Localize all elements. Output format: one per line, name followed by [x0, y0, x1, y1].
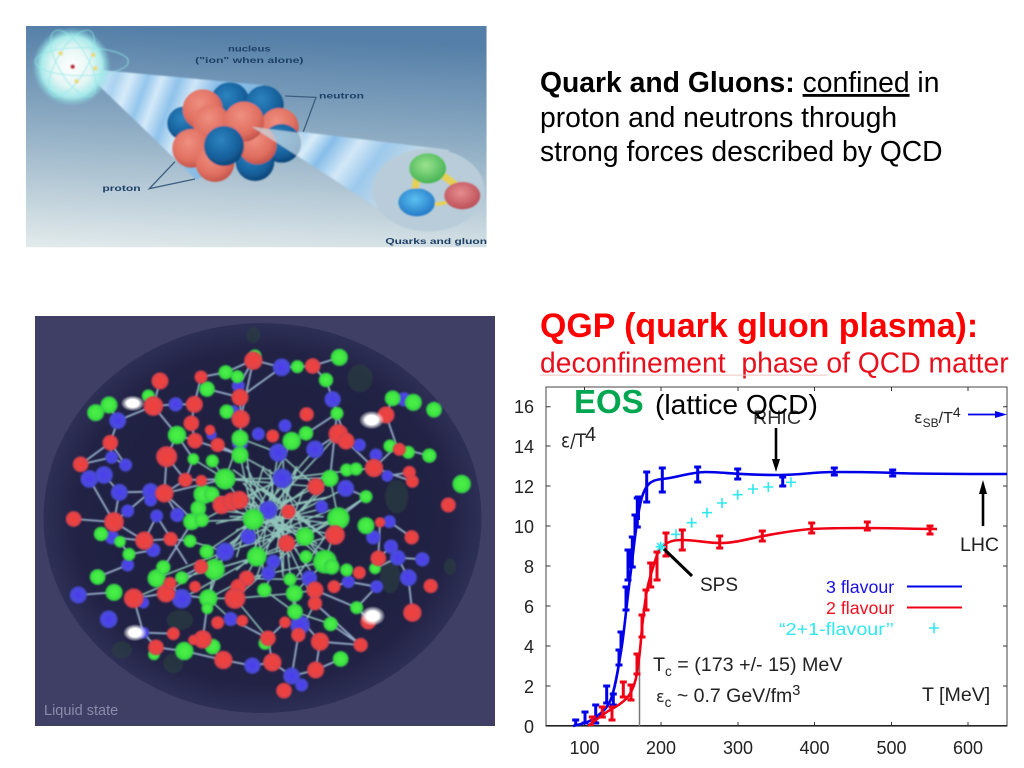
y axis title exponent: 4	[585, 424, 596, 446]
legend: “2+1-flavour’’	[779, 619, 894, 639]
y axis labels: 8	[524, 557, 534, 577]
label and arrow: RHIC: RHIC	[753, 407, 801, 429]
legend: 3 flavour	[826, 577, 894, 597]
diagram labels	[102, 43, 494, 246]
y axis title: ε/T	[561, 430, 586, 452]
label and arrow: RHIC	[753, 407, 801, 472]
ghost particles	[112, 327, 456, 673]
y axis labels: 4	[524, 637, 534, 657]
text block: quark and gluons: strong forces described by QCD	[540, 135, 943, 167]
x axis labels: 200	[646, 738, 676, 758]
panel: quark gluon plasma simulation	[35, 316, 495, 726]
icon: atom	[32, 24, 128, 106]
x axis title: T [MeV]	[922, 684, 990, 706]
white glowing particles	[121, 395, 385, 641]
subheading: deconfinement phase: deconfinement phase of QCD matter	[540, 346, 1009, 378]
label and arrow: Stefan-Boltzmann limit: 4	[953, 404, 961, 420]
text block: quark and gluons: Quark and Gluons: confined in	[540, 66, 939, 98]
label and arrow: Stefan-Boltzmann limit	[914, 404, 1007, 430]
y axis labels	[514, 397, 534, 737]
x axis labels	[569, 738, 983, 758]
y axis labels: 2	[524, 677, 534, 697]
y axis labels: 0	[524, 717, 534, 737]
legend	[779, 577, 962, 639]
curve: 2 flavour	[588, 522, 937, 726]
heading: QGP: QGP (quark gluon plasma):	[540, 307, 978, 345]
label and arrow: SPS	[664, 549, 738, 596]
icon: quarks and gluons	[398, 153, 480, 216]
label and arrow: Stefan-Boltzmann limit: SB	[923, 416, 939, 430]
x axis labels: 300	[723, 738, 753, 758]
x axis labels: 600	[953, 738, 983, 758]
text block: quark and gluons: proton and neutrons through	[540, 101, 897, 133]
icon: second cone to quarks	[296, 131, 450, 206]
y axis labels: 14	[514, 437, 534, 457]
critical temperature line	[638, 660, 640, 726]
text block: quark and gluons	[540, 66, 943, 167]
label and arrow: SPS: SPS	[700, 575, 738, 596]
x axis labels: 100	[569, 738, 600, 758]
critical temperature text: c	[665, 695, 672, 710]
icon: cone from atom to nucleus	[98, 70, 263, 180]
x axis labels: 400	[799, 738, 830, 758]
label and arrow: LHC	[960, 480, 999, 556]
text block: EOS heading: EOS	[574, 383, 644, 420]
icon: quark bubble	[372, 149, 484, 231]
critical temperature text: c	[665, 664, 672, 679]
legend: 2 flavour	[826, 598, 894, 618]
plot frame	[546, 387, 1007, 726]
leader lines	[149, 96, 316, 189]
red quarks	[66, 352, 455, 698]
critical temperature text: ~ 0.7 GeV/fm	[671, 685, 792, 707]
icon: nucleus protons and neutrons	[167, 82, 303, 182]
particle bonds	[74, 357, 429, 676]
y axis labels: 10	[514, 517, 534, 537]
x axis labels: 500	[876, 738, 907, 758]
label and arrow: LHC: LHC	[960, 534, 999, 556]
label and arrow: Stefan-Boltzmann limit: /T	[939, 410, 953, 427]
critical temperature text: ε	[656, 687, 665, 706]
chart: energy density vs temperature	[514, 387, 1007, 758]
green quarks	[88, 349, 470, 666]
blue quarks	[70, 359, 429, 691]
diagram labels: neutron	[319, 90, 364, 100]
caption: liquid state: Liquid state	[44, 703, 118, 719]
diagram labels: Quarks and gluons	[385, 236, 494, 246]
chart background and cut-off underline	[540, 375, 827, 376]
diagram labels: proton	[102, 183, 141, 193]
y axis labels: 12	[514, 477, 534, 497]
critical temperature text: 3	[792, 683, 800, 699]
text block: lattice QCD: (lattice QCD)	[655, 388, 818, 420]
series: 2+1 flavour markers	[656, 477, 939, 633]
critical temperature text: = (173 +/- 15) MeV	[672, 654, 843, 676]
diagram labels: nucleus	[228, 43, 271, 53]
critical temperature text: T	[653, 654, 665, 676]
label and arrow: Stefan-Boltzmann limit: ε	[914, 408, 923, 427]
panel: atom to quarks diagram	[26, 24, 494, 247]
curve: 3 flavour	[572, 467, 1007, 726]
y axis labels: 16	[514, 397, 534, 417]
diagram labels: ("ion" when alone)	[195, 55, 304, 65]
y axis labels: 6	[524, 597, 534, 617]
critical temperature text	[653, 654, 843, 710]
